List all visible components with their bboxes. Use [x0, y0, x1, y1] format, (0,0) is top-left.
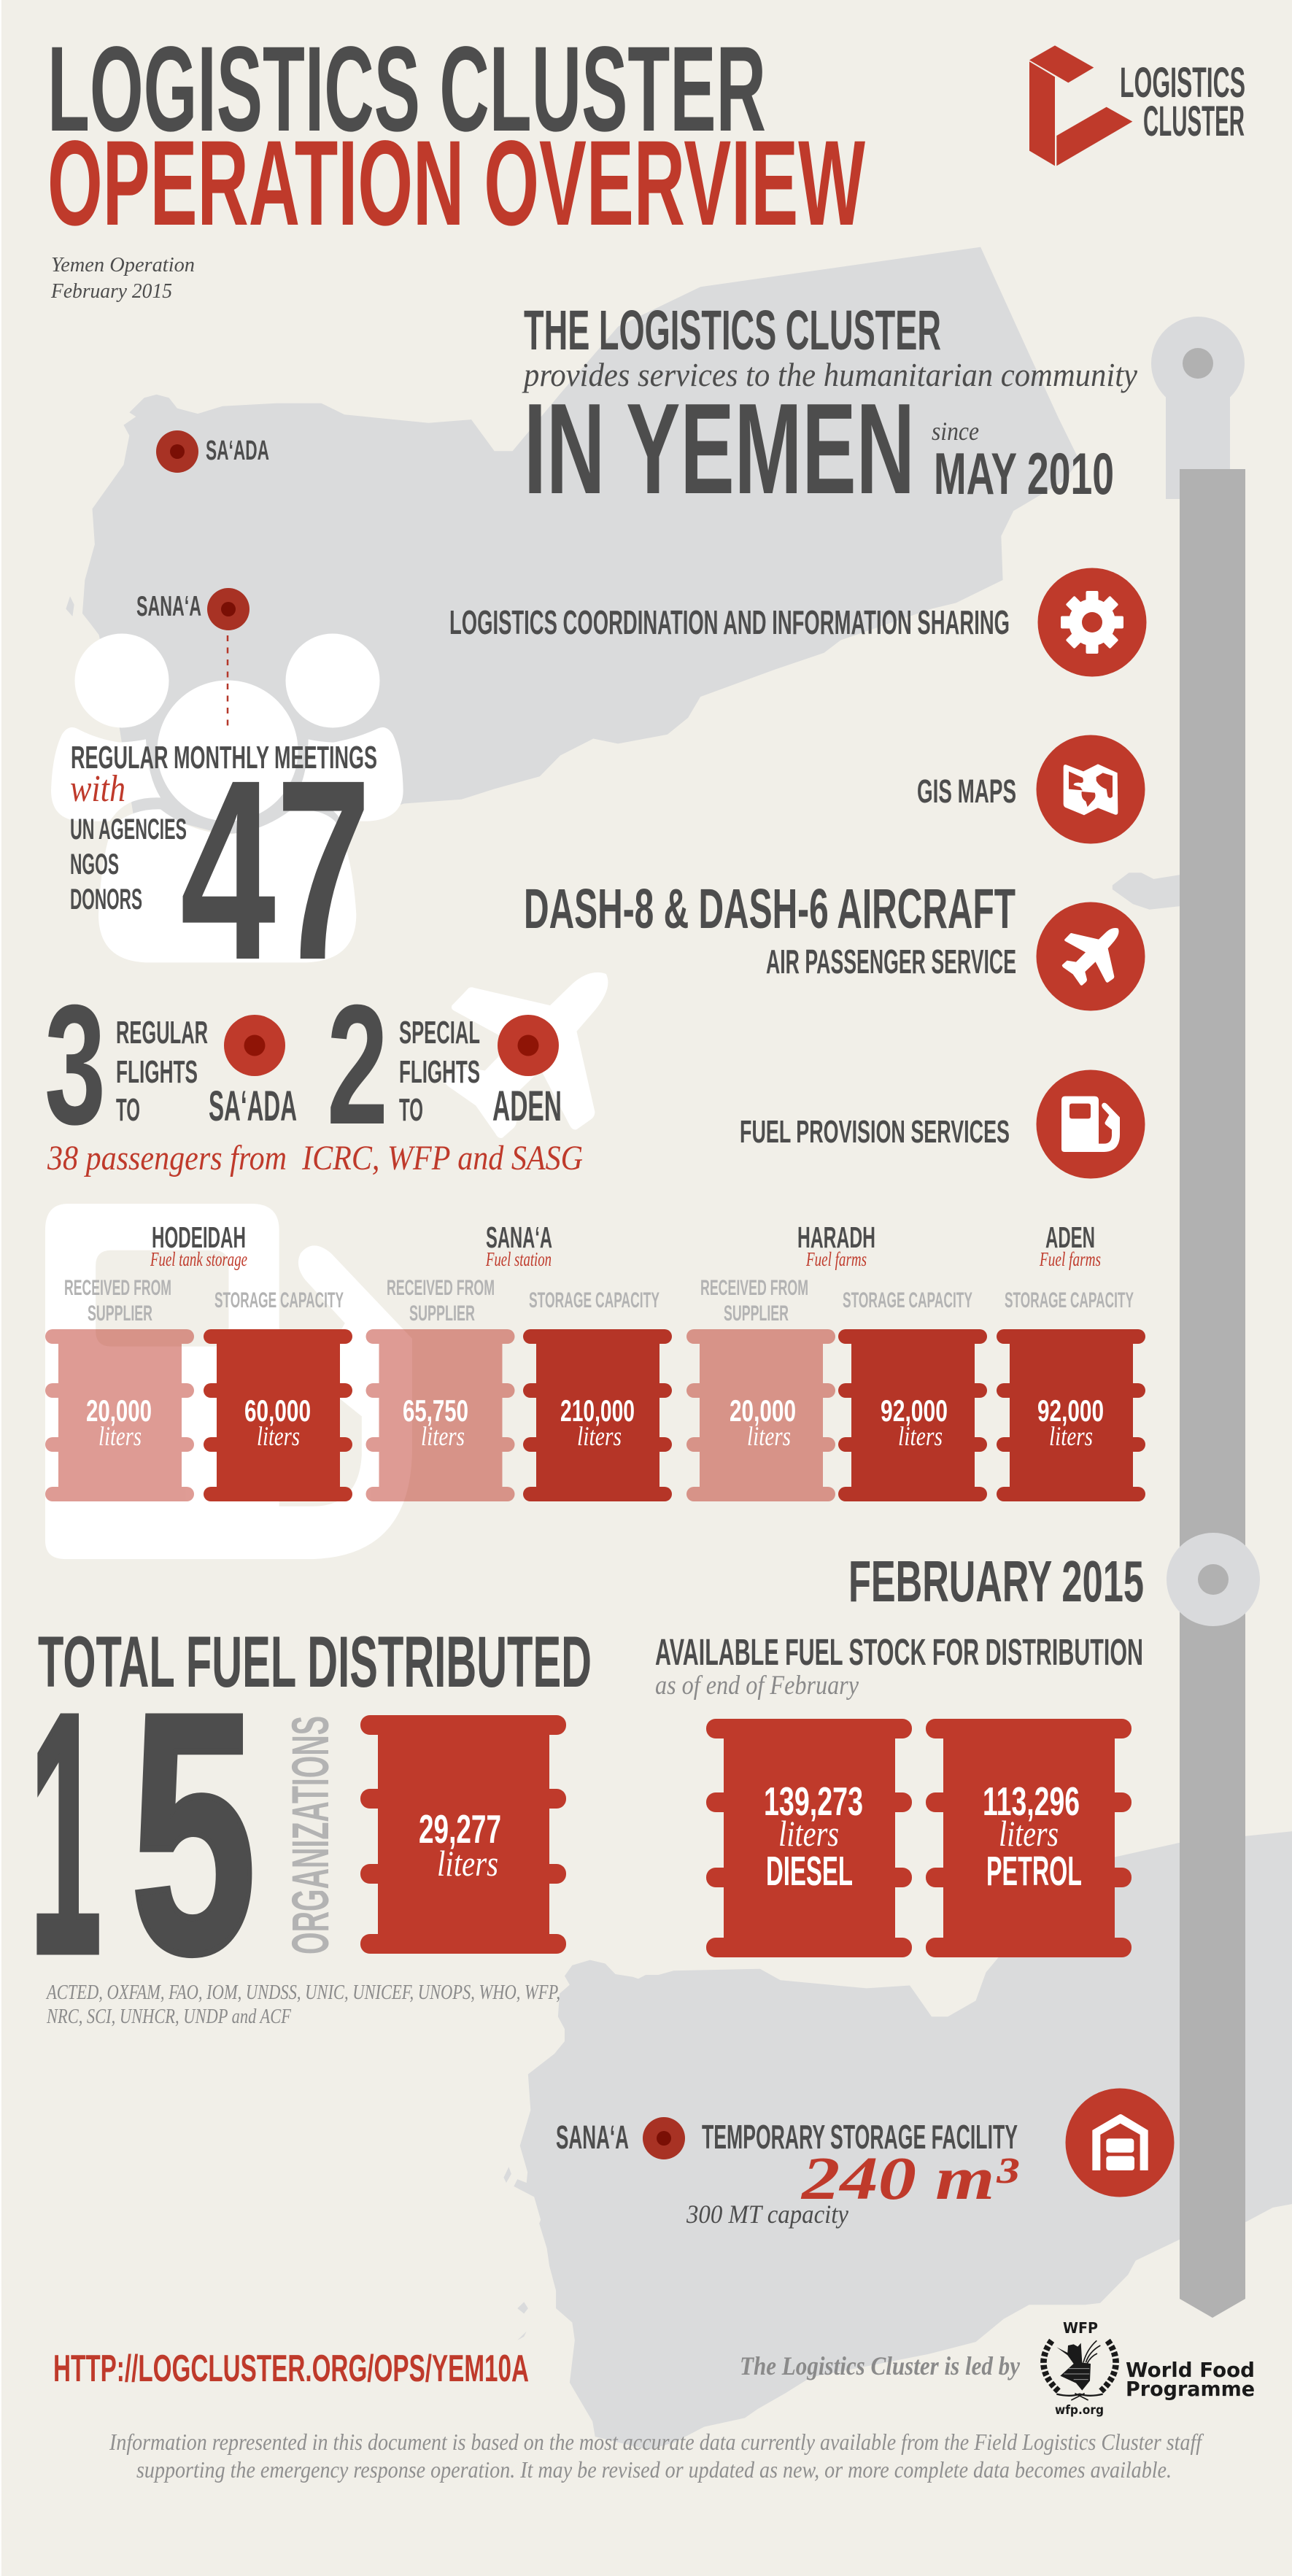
services: aircraft: DASH-8 & DASH-6 AIRCRAFT — [524, 878, 1016, 940]
meetings block: DONORS — [70, 883, 142, 916]
barrel: Haradh storage: liters — [898, 1422, 943, 1452]
pin: Sa'ada: SA‘ADA — [206, 436, 269, 466]
barrel: Sana'a storage: 210,000 — [560, 1393, 635, 1428]
intro heading: since — [932, 417, 979, 446]
barrel: diesel: liters — [778, 1813, 839, 1854]
column labels: SUPPLIER — [88, 1301, 152, 1326]
icon: white fuel pump background — [45, 1204, 412, 1559]
barrel: Haradh received: 20,000 — [730, 1393, 796, 1428]
barrel: Haradh storage: 92,000 — [881, 1393, 948, 1428]
column labels — [64, 1276, 1134, 1326]
barrel: diesel: 139,273 — [764, 1779, 863, 1824]
organizations list: ACTED, OXFAM, FAO, IOM, UNDSS, UNIC, UNICEF, UNOPS, WHO, WFP, — [45, 1981, 560, 2004]
location headings: Fuel farms — [805, 1248, 867, 1270]
flights: special to Aden — [327, 969, 562, 1160]
disclaimer: supporting the emergency response operation. It may be revised or updated as new, or more complete data becomes available. — [136, 2456, 1172, 2483]
organizations list — [45, 1981, 560, 2028]
column labels: STORAGE CAPACITY — [214, 1288, 344, 1312]
barrel: petrol — [926, 1719, 1132, 1957]
barrel: Hodeidah storage — [204, 1329, 352, 1501]
meetings block: 47 — [180, 726, 371, 1013]
column labels: SUPPLIER — [724, 1301, 789, 1326]
column labels: RECEIVED FROM — [387, 1276, 495, 1300]
icon: white people — [51, 633, 403, 962]
barrel: Hodeidah storage: 60,000 — [244, 1393, 311, 1428]
location headings: Fuel farms — [1039, 1248, 1101, 1270]
led by text: The Logistics Cluster is led by — [740, 2351, 1021, 2380]
barrel: Sana'a storage: liters — [577, 1422, 622, 1452]
pin: Sana'a with connector: SANA‘A — [136, 591, 201, 622]
flights: regular to Sa'ada — [45, 969, 297, 1160]
barrel: Aden storage: liters — [1049, 1422, 1093, 1452]
subtitle: operation and date: Yemen Operation — [51, 253, 195, 276]
temporary storage facility: SANA‘A — [556, 2119, 629, 2156]
location headings: HARADH — [797, 1221, 875, 1254]
icon: warehouse — [1065, 2088, 1175, 2197]
flights: regular to Sa'ada: 3 — [45, 969, 106, 1160]
intro heading: IN YEMEN — [524, 376, 915, 521]
intro heading — [522, 299, 1138, 521]
pin: Sana'a with connector — [136, 588, 249, 727]
barrel: Sana'a received: 65,750 — [403, 1393, 468, 1428]
barrel: Hodeidah received — [45, 1329, 194, 1501]
total fuel distributed: TOTAL FUEL DISTRIBUTED — [38, 1621, 592, 1702]
title: LOGISTICS CLUSTER — [47, 22, 766, 157]
temporary storage facility: TEMPORARY STORAGE FACILITY — [702, 2118, 1018, 2156]
available fuel stock heading: as of end of February — [655, 1671, 859, 1701]
logo: World Food Programme: World Food — [1126, 2359, 1255, 2382]
intro heading: MAY 2010 — [934, 441, 1114, 507]
passengers note: 38 passengers from ICRC, WFP and SASG — [47, 1139, 583, 1177]
barrel: Aden storage: 92,000 — [1037, 1393, 1104, 1428]
barrel: Sana'a storage — [523, 1329, 672, 1501]
services: fuel provision: FUEL PROVISION SERVICES — [740, 1114, 1010, 1150]
meetings block: UN AGENCIES — [70, 813, 187, 846]
flights: special to Aden: SPECIAL — [399, 1015, 480, 1051]
services: GIS maps: GIS MAPS — [917, 773, 1016, 810]
total fuel distributed — [30, 1621, 592, 2024]
column labels: STORAGE CAPACITY — [843, 1288, 972, 1312]
barrel: petrol: PETROL — [986, 1848, 1082, 1895]
pin: Sa'ada — [156, 430, 269, 473]
available fuel stock heading — [655, 1631, 1143, 1701]
barrel: Hodeidah received: 20,000 — [86, 1393, 152, 1428]
flights: regular to Sa'ada: REGULAR — [116, 1015, 208, 1051]
location headings: SANA‘A — [486, 1221, 552, 1254]
barrel: Haradh received — [686, 1329, 835, 1501]
meetings block: REGULAR MONTHLY MEETINGS — [71, 740, 377, 775]
services: aircraft: AIR PASSENGER SERVICE — [766, 943, 1016, 980]
intro heading: THE LOGISTICS CLUSTER — [524, 299, 941, 362]
location headings — [150, 1221, 1101, 1270]
meetings block — [70, 726, 377, 1013]
barrel: Sana'a received — [366, 1329, 515, 1501]
barrel: total distributed: liters — [437, 1843, 498, 1884]
flights: regular to Sa'ada: TO — [116, 1092, 140, 1128]
logo: World Food Programme — [1043, 2319, 1255, 2418]
location headings: Fuel tank storage — [150, 1248, 247, 1270]
logo: World Food Programme: wfp.org — [1055, 2403, 1104, 2418]
temporary storage facility — [556, 2117, 1019, 2229]
total fuel distributed: 1 — [30, 1643, 101, 2024]
intro heading: provides services to the humanitarian community — [522, 356, 1138, 393]
meetings block: with — [70, 768, 125, 810]
temporary storage facility: 240 m³ — [800, 2145, 1019, 2213]
column labels: RECEIVED FROM — [64, 1276, 171, 1300]
flights: special to Aden: 2 — [327, 969, 388, 1160]
logo: World Food Programme: WFP — [1063, 2319, 1098, 2337]
services: GIS maps — [917, 735, 1145, 843]
services: fuel provision — [740, 1070, 1145, 1179]
logo: World Food Programme: Programme — [1126, 2378, 1255, 2401]
map: Yemen lower — [503, 1831, 1292, 2450]
location headings: ADEN — [1045, 1221, 1095, 1254]
timeline marker: February — [1167, 1533, 1260, 1626]
title — [47, 22, 865, 251]
total fuel distributed: ORGANIZATIONS — [282, 1716, 340, 1954]
barrel: Haradh received: liters — [747, 1422, 791, 1452]
flights: special to Aden: ADEN — [492, 1083, 562, 1130]
barrel: petrol: liters — [999, 1813, 1059, 1854]
organizations list: NRC, SCI, UNHCR, UNDP and ACF — [46, 2005, 291, 2028]
location headings: HODEIDAH — [152, 1221, 246, 1254]
link: HTTP://LOGCLUSTER.ORG/OPS/YEM10A — [53, 2348, 529, 2390]
logo: Logistics Cluster — [1029, 45, 1245, 166]
barrel: Sana'a received: liters — [421, 1422, 465, 1452]
barrel: Aden storage — [997, 1329, 1145, 1501]
barrel: total distributed — [360, 1715, 566, 1954]
barrel: diesel: DIESEL — [766, 1848, 853, 1895]
flights: special to Aden: FLIGHTS — [399, 1054, 480, 1090]
icon: white plane background — [444, 972, 608, 1138]
barrel: Hodeidah received: liters — [98, 1422, 142, 1452]
meetings block: NGOS — [70, 848, 119, 881]
barrel: Haradh storage — [838, 1329, 987, 1501]
flights: regular to Sa'ada: SA‘ADA — [209, 1083, 297, 1130]
temporary storage facility: 300 MT capacity — [686, 2200, 848, 2229]
column labels: STORAGE CAPACITY — [529, 1288, 659, 1312]
barrel: petrol: 113,296 — [983, 1779, 1080, 1824]
total fuel distributed: 5 — [131, 1643, 256, 2024]
location headings: Fuel station — [485, 1248, 552, 1270]
barrel: diesel — [706, 1719, 912, 1957]
disclaimer — [109, 2429, 1204, 2483]
barrel: Hodeidah storage: liters — [257, 1422, 300, 1452]
column labels: STORAGE CAPACITY — [1005, 1288, 1134, 1312]
timeline bar — [1151, 317, 1245, 2318]
subtitle: operation and date: February 2015 — [50, 279, 172, 303]
barrel: total distributed: 29,277 — [419, 1806, 501, 1852]
column labels: SUPPLIER — [409, 1301, 475, 1326]
flights: special to Aden: TO — [399, 1092, 423, 1128]
column labels: RECEIVED FROM — [700, 1276, 808, 1300]
services: aircraft — [524, 878, 1145, 1011]
map: Yemen upper — [66, 247, 1180, 910]
subtitle: operation and date — [50, 253, 195, 303]
flights: regular to Sa'ada: FLIGHTS — [116, 1054, 198, 1090]
services: coordination — [449, 568, 1147, 677]
